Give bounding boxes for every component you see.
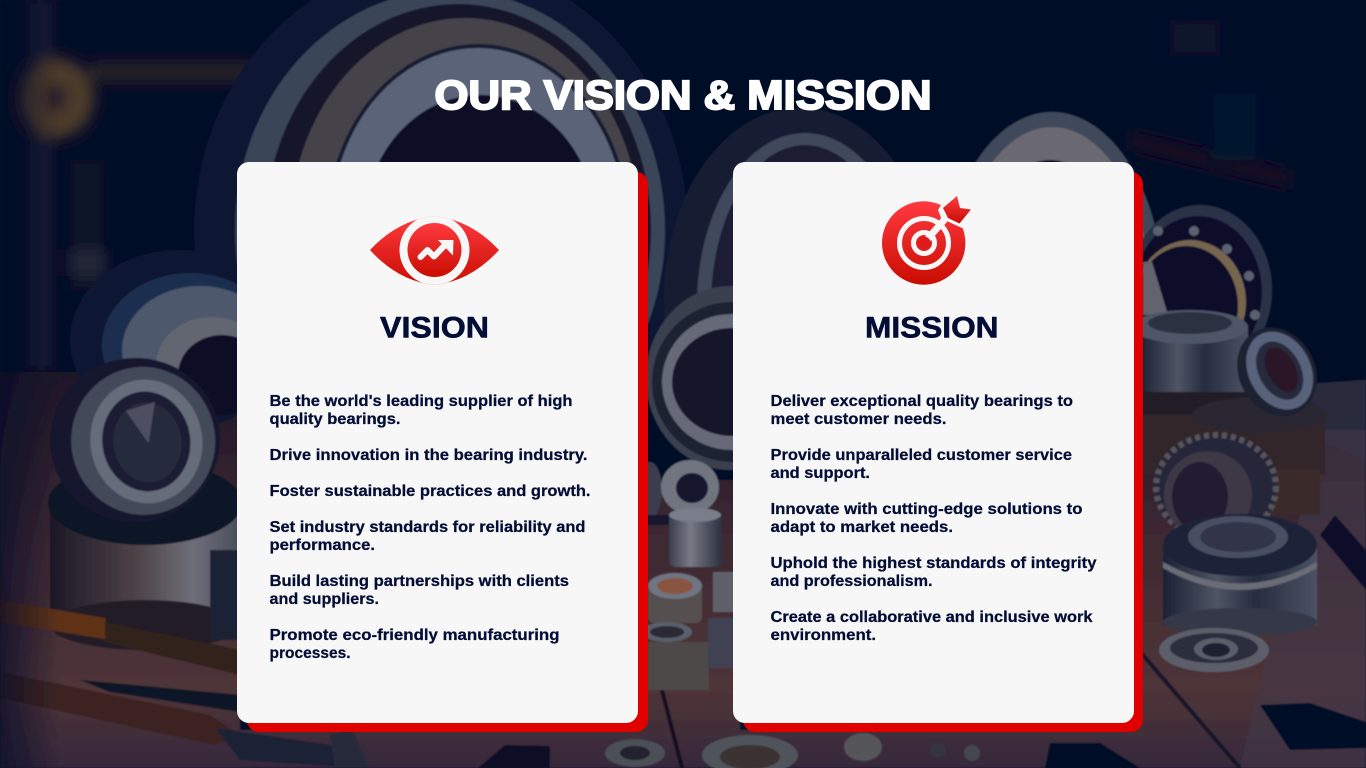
seal ring (1159, 628, 1269, 672)
vision statements: performance. (270, 537, 375, 554)
vignette left (0, 0, 60, 768)
floor (0, 372, 240, 768)
title: OUR VISION & MISSION (434, 72, 932, 118)
vision statements: Be the world's leading supplier of high (270, 393, 572, 410)
vision statements: Promote eco-friendly manufacturing (270, 627, 560, 644)
mission card (733, 162, 1134, 723)
mission statements: Deliver exceptional quality bearings to (770, 393, 1073, 410)
tools (0, 600, 110, 640)
vision statements: Foster sustainable practices and growth. (270, 483, 590, 500)
icon: target with arrow (882, 195, 975, 285)
mission statements: adapt to market needs. (770, 519, 953, 536)
mission statements: Innovate with cutting-edge solutions to (770, 501, 1082, 518)
vision statements: quality bearings. (270, 411, 400, 428)
mission statements: and professionalism. (770, 573, 932, 590)
middle gap bearing (646, 286, 814, 470)
vision statements (270, 393, 590, 662)
panel: vision (237, 162, 648, 732)
small pins (669, 512, 722, 567)
mission statements: Uphold the highest standards of integrity (770, 555, 1097, 572)
angled small bearing (1222, 314, 1332, 430)
left bearings (70, 250, 286, 430)
gear bearing (1156, 435, 1276, 539)
mission statements: meet customer needs. (770, 411, 946, 428)
mission statements: and support. (770, 465, 870, 482)
bottom rings (605, 739, 665, 767)
vision card (237, 162, 638, 723)
panel: mission (733, 162, 1143, 732)
big top bearing (194, 0, 688, 500)
bearing behind mission card (664, 108, 936, 492)
mission statements: Create a collaborative and inclusive work (770, 609, 1093, 626)
vision statements: processes. (270, 645, 350, 662)
right ball bearing (1128, 205, 1272, 375)
vision heading: VISION (380, 312, 489, 344)
mission statements: environment. (770, 627, 876, 644)
cylinder right (1140, 325, 1248, 395)
vision statements: Set industry standards for reliability and (270, 519, 586, 536)
mission statements (770, 393, 1097, 644)
bottom right cylinder (1163, 548, 1317, 625)
vision statements: Build lasting partnerships with clients (270, 573, 569, 590)
mission heading: MISSION (865, 312, 998, 344)
vision statements: and suppliers. (270, 591, 379, 608)
mission card red offset (743, 172, 1143, 732)
left cylinder (50, 500, 240, 625)
mission statements: Provide unparalleled customer service (770, 447, 1072, 464)
vision card red offset (247, 172, 648, 732)
icon: eye with rising arrow (370, 215, 499, 285)
vision statements: Drive innovation in the bearing industry. (270, 447, 588, 464)
